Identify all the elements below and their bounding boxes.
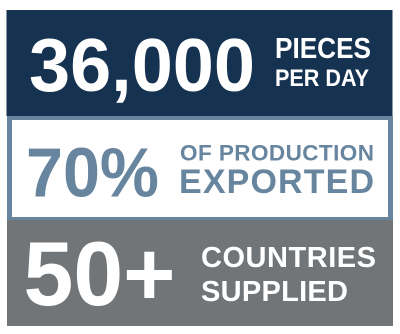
- stat: 36,000: 36,000: [29, 23, 255, 107]
- label: countries: COUNTRIES: [201, 242, 376, 274]
- label: pieces: PIECES: [275, 33, 371, 65]
- panel: production exported: [7, 116, 393, 220]
- label: exported: EXPORTED: [179, 163, 374, 201]
- label: supplied: SUPPLIED: [201, 276, 348, 308]
- label: per day: PER DAY: [275, 65, 369, 92]
- stat: 70%: 70%: [26, 134, 159, 212]
- label: of production: OF PRODUCTION: [180, 140, 374, 166]
- panel: pieces per day: [6, 10, 392, 116]
- stat: 50+: 50+: [24, 224, 176, 325]
- panel: countries supplied: [7, 220, 393, 326]
